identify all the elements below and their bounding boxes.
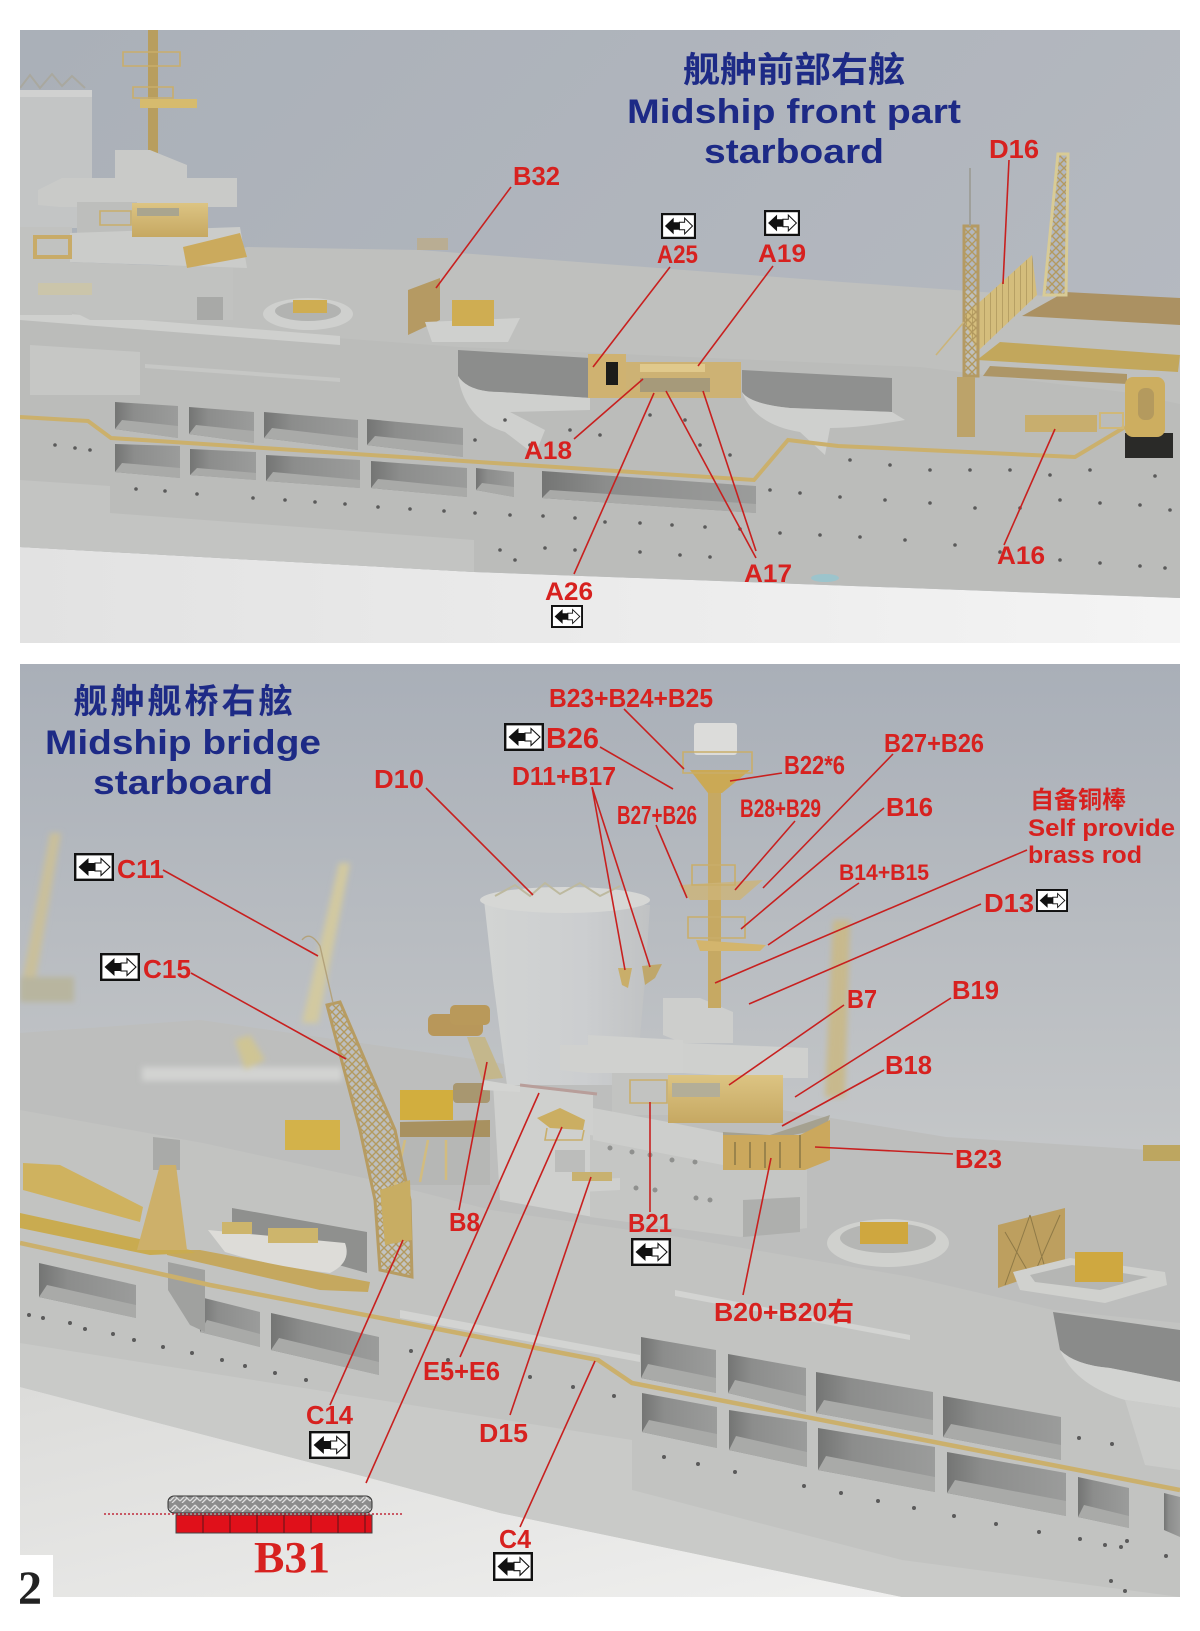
island base block under funnel — [493, 1083, 593, 1217]
hull portholes — [142, 381, 446, 401]
photo background — [20, 30, 1180, 643]
D15 walkway — [543, 1150, 620, 1193]
callout: D16 — [989, 134, 1039, 284]
callout: D13 — [749, 888, 1067, 1004]
callout: B14+B15: B14+B15 — [839, 860, 929, 885]
A25 plate with door — [588, 354, 626, 398]
callout: B18 — [782, 1050, 932, 1126]
callout: E5+E6: E5+E6 — [423, 1356, 500, 1386]
panel: midship front part starboard — [20, 30, 1180, 643]
callout: B19: B19 — [952, 975, 999, 1005]
callout: B27+B26 upper: B27+B26 — [884, 728, 984, 758]
funnel — [480, 883, 650, 1085]
crane jib — [302, 936, 412, 1277]
heading: midship bridge: Midship bridge — [45, 724, 321, 762]
gold side rail — [20, 1243, 1180, 1490]
hull side — [20, 1110, 1180, 1597]
callout: D15: D15 — [479, 1418, 528, 1448]
callout: B23 — [815, 1144, 1002, 1174]
callout: B26: B26 — [546, 723, 599, 755]
gold bridge — [630, 1075, 783, 1123]
callout: A25 — [593, 214, 698, 367]
page number: 2 — [18, 1562, 42, 1615]
island superstructure — [20, 150, 247, 320]
callout: B7: B7 — [847, 984, 877, 1014]
gold side rail — [20, 417, 1125, 480]
hull pillar shadow — [168, 1262, 205, 1332]
small gold fittings on funnel — [618, 964, 662, 988]
B31 part diagram — [104, 1496, 404, 1582]
callout: B26 — [505, 723, 673, 789]
callout: A17 — [666, 391, 792, 588]
callout: C11 — [75, 854, 318, 956]
blurred distant cranes and aircraft — [20, 833, 850, 1097]
callout: B21: B21 — [628, 1208, 672, 1238]
gold plate — [998, 1208, 1065, 1288]
photo background — [20, 664, 1180, 1184]
callout: B18: B18 — [885, 1050, 932, 1080]
deck platform with gold vehicles — [285, 1090, 490, 1185]
lower hull belt — [20, 1343, 1180, 1597]
gun platform cups — [428, 1005, 520, 1103]
side walkway ledges — [30, 345, 340, 395]
callout: self provide brass rod: brass rod — [1028, 842, 1142, 869]
hull side — [20, 313, 1180, 598]
heading: midship front part — [627, 51, 961, 171]
callout: self provide brass rod: 自备铜棒 — [1030, 787, 1126, 814]
callout: B27+B26 lower: B27+B26 — [617, 800, 697, 830]
callout: B28+B29: B28+B29 — [740, 795, 821, 823]
callout: B7 — [729, 984, 877, 1085]
callout: D10: D10 — [374, 764, 424, 794]
callout: A19: A19 — [758, 240, 806, 268]
heading: midship bridge: 舰舯舰桥右舷 — [74, 683, 292, 721]
hull portholes — [646, 1307, 1041, 1382]
callout: C15 — [101, 954, 346, 1059]
callout: C15: C15 — [143, 954, 191, 984]
callout: B32: B32 — [513, 161, 560, 191]
callout: B28+B29 — [735, 795, 821, 890]
panel: midship bridge starboard — [20, 664, 1180, 1597]
B31 railing on bridge — [520, 1085, 597, 1094]
callout: B20+B20右: B20+B20右 — [714, 1297, 854, 1327]
callout: B19 — [795, 975, 999, 1097]
callout: A25: A25 — [657, 241, 698, 269]
callout: A16 — [997, 429, 1055, 570]
stern gold fitting — [1125, 377, 1173, 458]
D16 railing — [963, 255, 1037, 352]
callout: B14+B15 — [768, 860, 929, 945]
far flight deck — [20, 1020, 1180, 1330]
sponson openings — [458, 350, 905, 455]
hull side holes — [55, 415, 1170, 568]
E5 E6 gold canopy — [537, 1108, 585, 1140]
floor stain — [811, 574, 839, 582]
gun tub with mount — [827, 1219, 949, 1267]
callout: C14: C14 — [306, 1400, 354, 1430]
callout: B22*6 — [730, 750, 845, 781]
wall pillar — [153, 1137, 180, 1170]
heading: midship front part: 舰舯前部右舷 — [683, 51, 905, 90]
flight deck surface — [20, 247, 1180, 410]
callout: B20+B20右 — [714, 1158, 854, 1327]
callout: A17: A17 — [744, 560, 792, 588]
callout: B23+B24+B25: B23+B24+B25 — [549, 683, 713, 713]
B32 plate — [408, 278, 440, 335]
callout: A19 — [698, 211, 806, 366]
lattice mast — [936, 168, 978, 437]
callout: A26: A26 — [545, 578, 593, 606]
callout: D15 — [479, 1177, 591, 1448]
deck fitting — [417, 238, 448, 250]
callout: B27+B26 lower — [617, 800, 697, 898]
callout: B23+B24+B25 — [549, 683, 713, 769]
deck edge strip — [20, 314, 340, 345]
right sponson — [1053, 1312, 1180, 1470]
callout: B16 — [741, 792, 933, 929]
far lattice crane — [1044, 154, 1068, 295]
callout: self provide brass rod — [715, 787, 1175, 983]
callout: D16: D16 — [989, 134, 1039, 164]
blurred aircraft — [142, 1035, 342, 1081]
callout: A16: A16 — [997, 542, 1045, 570]
callout: B8: B8 — [449, 1207, 480, 1237]
foreground table — [20, 547, 1180, 643]
callout: A18 — [524, 379, 643, 465]
A16 platform — [1025, 413, 1123, 432]
lower hull belt — [128, 552, 456, 571]
bridge wall — [612, 1067, 672, 1115]
A19 platform — [626, 362, 741, 398]
heading: midship front part: starboard — [704, 133, 884, 171]
mast — [679, 723, 766, 1008]
stern deck gold plates — [977, 292, 1180, 384]
callout: A26 — [545, 393, 654, 627]
B31 pointer line — [366, 1093, 539, 1483]
mast — [123, 30, 197, 160]
callout: D10 — [374, 764, 533, 895]
callout: B23: B23 — [955, 1144, 1002, 1174]
far gold fitting — [1143, 1145, 1180, 1161]
square gun tub with mount — [1013, 1252, 1167, 1303]
gold bridge wings — [723, 1115, 830, 1170]
callout: D13: D13 — [984, 888, 1034, 918]
heading: midship bridge — [45, 683, 321, 802]
callout: B22*6: B22*6 — [784, 750, 845, 780]
hull gallery openings — [115, 402, 756, 513]
callout: self provide brass rod: Self provide — [1028, 815, 1175, 842]
callout: B32 — [436, 161, 560, 288]
bridge tiers — [560, 998, 808, 1078]
hull recess near boat — [232, 1208, 367, 1273]
foreground table — [20, 1387, 902, 1597]
side ledge — [400, 1290, 910, 1362]
callout: B8 — [449, 1062, 487, 1237]
callout: D11+B17 — [512, 761, 650, 970]
funnel — [20, 74, 92, 228]
left gold crane assembly — [20, 1163, 195, 1255]
callout: C4 — [494, 1361, 595, 1580]
callout: C11: C11 — [117, 854, 164, 884]
heading: midship front part: Midship front part — [627, 93, 961, 131]
callout: C14 — [306, 1240, 403, 1458]
page number — [0, 1555, 53, 1615]
callout: E5+E6 — [423, 1127, 562, 1386]
island lower block — [590, 1135, 807, 1237]
callout: A18: A18 — [524, 437, 572, 465]
callout: B21 — [628, 1102, 672, 1265]
hull side holes — [29, 1315, 1166, 1591]
heading: midship bridge: starboard — [93, 764, 273, 802]
gun tub with mount — [263, 298, 353, 330]
callout: C4: C4 — [499, 1524, 532, 1554]
callout: B27+B26 upper — [763, 728, 984, 888]
callout: D11+B17: D11+B17 — [512, 761, 616, 791]
boat with gold platform — [167, 1222, 370, 1292]
callout: B16: B16 — [886, 792, 933, 822]
B31 part diagram: B31 — [254, 1533, 330, 1582]
square gun tub with mount — [425, 300, 520, 342]
hull gallery openings — [39, 1263, 1180, 1537]
main tier — [593, 1108, 723, 1165]
